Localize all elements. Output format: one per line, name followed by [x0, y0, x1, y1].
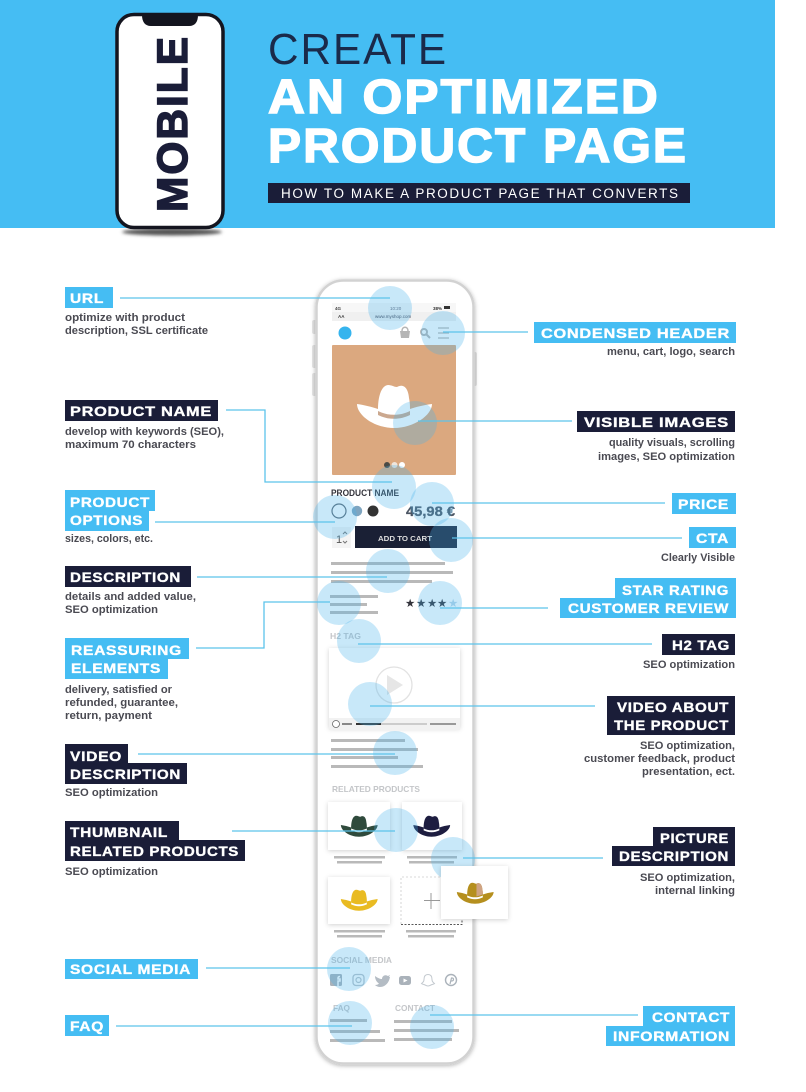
label: product name: develop with keywords (SEO), [65, 426, 224, 438]
label: contact information: CONTACT [652, 1009, 730, 1025]
label: description: details and added value, [65, 591, 196, 603]
label: star rating customer review [560, 578, 736, 618]
condensed header icons [338, 326, 449, 340]
title: CREATE [268, 25, 448, 74]
label: video about the product: presentation, ect. [642, 766, 735, 778]
label: description: SEO optimization [65, 604, 158, 616]
price: 45,98 € [406, 503, 455, 519]
quantity selector [332, 527, 351, 548]
quantity selector: 1 [336, 534, 342, 546]
star rating [405, 598, 458, 610]
star rating: ★ [416, 598, 426, 610]
label: FAQ: FAQ [70, 1018, 104, 1034]
header banner [0, 0, 775, 236]
label: product name: PRODUCT NAME [70, 403, 212, 419]
label: social media [65, 959, 198, 979]
label: thumbnail related products [65, 821, 245, 878]
video description lines [331, 739, 423, 768]
label: video description: DESCRIPTION [70, 766, 181, 782]
label: reassuring elements: ELEMENTS [71, 660, 161, 676]
connector lines [116, 298, 682, 1026]
label: product options: PRODUCT [70, 494, 150, 510]
label: visible images [577, 411, 735, 463]
browser status bar: 10:20 [390, 306, 402, 311]
label: video description [65, 744, 187, 799]
label: visible images: VISIBLE IMAGES [584, 414, 729, 430]
related product: green hat [328, 802, 390, 864]
label: video about the product: VIDEO ABOUT [617, 699, 729, 715]
star rating: ★ [405, 598, 415, 610]
related product: yellow hat [328, 877, 390, 938]
title: AN OPTIMIZED [268, 71, 660, 124]
label: video about the product: THE PRODUCT [614, 717, 729, 733]
label: picture description: DESCRIPTION [619, 848, 729, 864]
label: URL: optimize with product [65, 312, 185, 324]
label: video about the product [584, 696, 735, 778]
label: reassuring elements: REASSURING [71, 642, 182, 658]
reassuring lines [330, 595, 378, 614]
add to cart button: ADD TO CART [378, 534, 432, 543]
label: URL: description, SSL certificate [65, 325, 208, 337]
product name: PRODUCT NAME [331, 488, 399, 498]
label: CTA: CTA [696, 530, 729, 546]
label: thumbnail related products: RELATED PRODUCTS [70, 843, 239, 859]
label: visible images: images, SEO optimization [598, 451, 735, 463]
contact column: CONTACT [395, 1003, 436, 1013]
label: star rating customer review: CUSTOMER REVIEW [568, 600, 729, 616]
label: CTA [661, 527, 736, 564]
add to cart button [355, 526, 457, 548]
highlight circles [313, 286, 473, 1049]
browser status bar: AA [338, 314, 345, 319]
star rating: ★ [427, 598, 437, 610]
label: product options: OPTIONS [70, 512, 143, 528]
browser status bar: 38% [433, 306, 442, 311]
social media icons [330, 974, 456, 987]
social media heading: SOCIAL MEDIA [331, 955, 392, 965]
label: video about the product: customer feedback, product [584, 753, 735, 765]
label: condensed header: CONDENSED HEADER [541, 325, 730, 341]
FAQ column: FAQ [333, 1003, 350, 1013]
related products heading: RELATED PRODUCTS [332, 784, 420, 794]
label: product name [65, 400, 224, 451]
description lines [331, 562, 453, 583]
label: video description: SEO optimization [65, 787, 158, 799]
label: reassuring elements: refunded, guarantee, [65, 697, 178, 709]
label: URL [65, 287, 208, 337]
product image with hat [332, 345, 456, 475]
label: price: PRICE [678, 496, 729, 512]
icon: phone with MOBILE [117, 14, 223, 236]
FAQ column [330, 1003, 385, 1042]
label: price [672, 493, 736, 514]
label: description [65, 566, 196, 616]
contact column [394, 1003, 459, 1041]
label: H2 tag: H2 TAG [672, 637, 730, 653]
browser status bar: www.myshop.com [375, 314, 412, 319]
label: description: DESCRIPTION [70, 569, 181, 585]
label: H2 tag: SEO optimization [643, 659, 735, 671]
label: product name: maximum 70 characters [65, 439, 196, 451]
browser status bar [332, 303, 456, 321]
star rating: ★ [437, 598, 447, 610]
subtitle bar: HOW TO MAKE A PRODUCT PAGE THAT CONVERTS [281, 186, 678, 201]
label: contact information [606, 1006, 735, 1046]
label: condensed header [534, 322, 736, 358]
label: product options [65, 490, 155, 545]
label: picture description [612, 827, 735, 897]
label: reassuring elements [65, 638, 189, 722]
label: visible images: quality visuals, scrolling [609, 437, 735, 449]
browser status bar: 4G [335, 306, 342, 311]
title [268, 25, 688, 173]
color options [332, 504, 378, 518]
label: URL: URL [70, 290, 104, 306]
label: H2 tag [643, 634, 735, 671]
floating dragged product card [431, 837, 508, 919]
label: picture description: internal linking [655, 885, 735, 897]
label: thumbnail related products: THUMBNAIL [70, 824, 168, 840]
label: picture description: SEO optimization, [640, 872, 735, 884]
label: video description: VIDEO [70, 748, 122, 764]
star rating: ★ [448, 598, 458, 610]
title: PRODUCT PAGE [268, 120, 688, 173]
phone mockup [312, 280, 477, 1064]
label: reassuring elements: delivery, satisfied or [65, 684, 173, 696]
label: thumbnail related products: SEO optimization [65, 866, 158, 878]
video player [329, 648, 460, 730]
label: picture description: PICTURE [660, 830, 729, 846]
label: video about the product: SEO optimization, [640, 740, 735, 752]
label: social media: SOCIAL MEDIA [70, 961, 191, 977]
H2 tag label: H2 TAG [330, 631, 361, 641]
label: star rating customer review: STAR RATING [622, 582, 729, 598]
label: product options: sizes, colors, etc. [65, 533, 153, 545]
drop target with plus [401, 877, 462, 938]
label: condensed header: menu, cart, logo, search [607, 346, 735, 358]
label: contact information: INFORMATION [613, 1028, 730, 1044]
icon: phone with MOBILE: MOBILE [149, 35, 197, 212]
related product: navy hat [402, 802, 462, 864]
label: reassuring elements: return, payment [65, 710, 152, 722]
label: FAQ [65, 1015, 109, 1036]
label: CTA: Clearly Visible [661, 552, 735, 564]
